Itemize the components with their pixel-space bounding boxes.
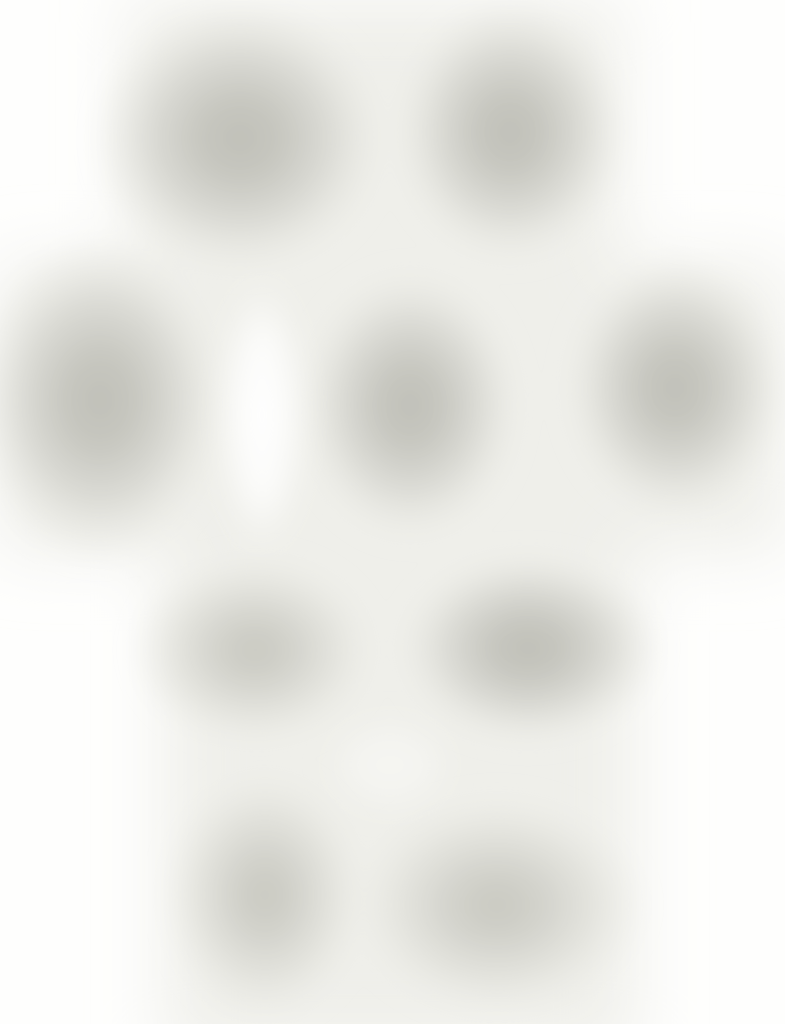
- panel: bottom right blob: [347, 790, 647, 1020]
- panel: top right blob: [390, 0, 630, 267]
- light gap between lower rows: [325, 715, 455, 815]
- panel: middle left blob: [0, 235, 230, 565]
- panel: middle centre blob: [295, 265, 525, 545]
- light gap between left and centre columns: [216, 275, 308, 555]
- panel: lower right blob: [393, 548, 663, 748]
- panel: bottom left blob: [160, 765, 370, 1024]
- panel: middle right blob: [560, 253, 785, 523]
- panel: lower left blob: [130, 550, 380, 750]
- panel: top left blob: [90, 0, 390, 278]
